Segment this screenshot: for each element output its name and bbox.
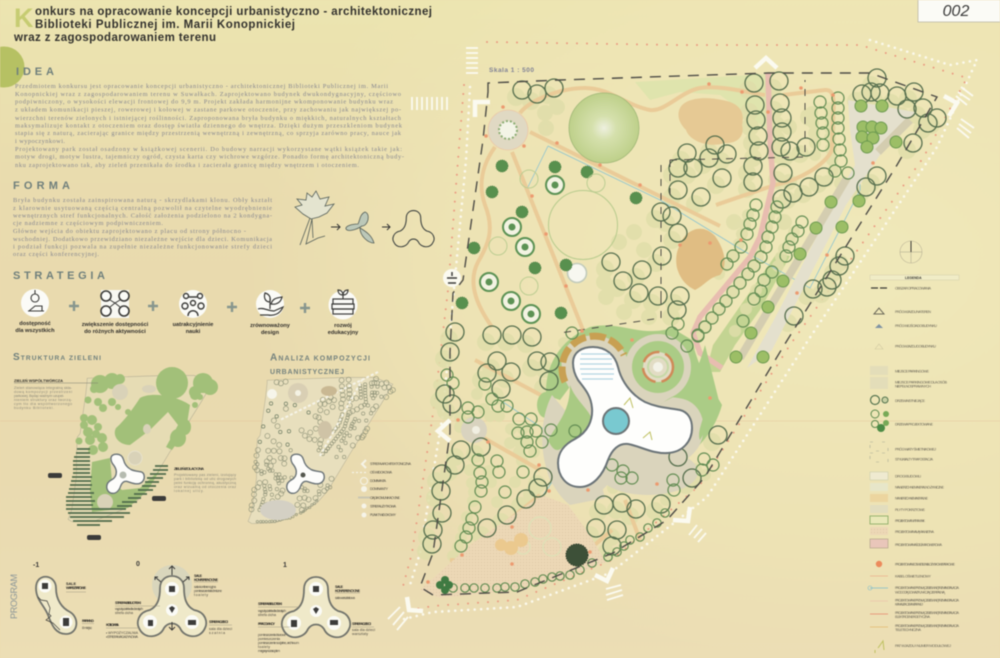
level one: sala warsztatowa xyxy=(335,596,355,600)
idea green circle xyxy=(0,46,24,88)
legend labels: NAWIERZCHNIE MINERALNE xyxy=(895,496,928,500)
piazza south-east xyxy=(598,449,698,495)
analysis legend: STREFA ARCHITEKTONICZNA xyxy=(370,462,412,466)
level zero: wypożyczalnia dla dorosłych xyxy=(115,607,143,611)
outlined existing trees xyxy=(423,69,946,555)
building surroundings: lawn xyxy=(546,325,722,455)
panel: forma xyxy=(13,180,434,258)
inner dashed zones xyxy=(560,80,805,333)
level zero: STREFA BIBLIOTEKI xyxy=(115,601,141,605)
level one: strefa cicha xyxy=(258,613,276,617)
legend labels: PROJEKTOWANE PRZYŁĄCZE I ZEWNĘTRZNA INSTALACJA xyxy=(895,598,959,602)
level one: 1 xyxy=(283,562,287,569)
strategy item: accessibility xyxy=(15,289,55,334)
greenery map xyxy=(48,367,218,540)
strategy item: learning xyxy=(173,290,213,335)
program label: PROGRAM xyxy=(9,574,19,619)
forma paragraph: wschodniej. Dodatkowo przewidziano niezależne wejście dla dzieci. Komunikacja xyxy=(13,236,272,243)
callout: isolating greenery: park i bibliotekę od ulic drogowych xyxy=(174,477,236,481)
strategy item: accessibility: dostępność xyxy=(19,321,51,327)
legend xyxy=(868,275,959,653)
sand play area xyxy=(420,495,606,598)
legend labels: MIEJSCE PARKINGOWE DLA OSÓB xyxy=(895,380,947,384)
site boundary dashed xyxy=(420,73,937,595)
legend labels: TELETECHNICZNA xyxy=(895,628,921,632)
level zero: SALE xyxy=(194,574,202,578)
level one: SALE xyxy=(335,585,343,589)
pink bicycle path xyxy=(693,73,773,368)
legend labels: NIEPEŁNOSPRAWNYCH xyxy=(895,384,931,388)
site outline xyxy=(68,375,213,522)
analysis legend: PUNKT WIDOKOWY xyxy=(370,513,397,517)
legend labels: PRÓG WIATY ŚMIETNIKOWEJ xyxy=(895,446,936,452)
level zero: szatnia xyxy=(209,631,225,635)
white crosswalk stripes xyxy=(388,48,974,630)
axes xyxy=(280,372,378,456)
strategy item: accessibility: dla wszystkich xyxy=(15,328,55,334)
idea paragraph: Przedmiotem konkursu jest opracowanie koncepcji urbanistyczno - architektonicznej Biblioteki Publicznej im. Marii xyxy=(15,83,388,90)
level one: PRACOWNICY xyxy=(258,622,275,626)
strategy item: education xyxy=(328,290,359,336)
west lawn patch xyxy=(537,392,555,418)
heading: STRUKTURA ZIELENI xyxy=(13,352,101,363)
analysis legend: DOMINANTA xyxy=(370,479,387,483)
pink and white perimeter dots xyxy=(400,40,977,620)
forma paragraph: Bryła budynku została zainspirowana naturą - skrzydlakami klonu. Obły kształt xyxy=(13,197,272,204)
legend labels: PRÓG WJAZDU DO BUDYNKU xyxy=(895,344,936,348)
legend labels: PROJEKTOWANA ŁĄKA KWIETNA xyxy=(895,530,934,534)
sheet number box xyxy=(918,0,1000,22)
level zero: strefa cicha xyxy=(115,611,133,615)
analysis legend: OŚ WIDOKOWA xyxy=(370,470,393,474)
central atrium xyxy=(603,408,629,434)
analysis legend: STREFA UŻYTKOWA xyxy=(370,504,397,508)
level minus one: SALE xyxy=(66,582,76,586)
level one: toalety xyxy=(258,645,270,649)
panel: program xyxy=(9,561,375,653)
legend symbols xyxy=(868,288,889,653)
legend labels: PROJEKTOWANE PRZYŁĄCZE I ZEWNĘTRZNA INSTALACJA xyxy=(895,586,959,590)
idea paragraph: wierzchni terenów zielonych i istniejącej roślinności. Zaproponowana bryła budynku o miękkich, naturalnych kształtach xyxy=(15,115,402,122)
legend labels: KABEL OŚWIETLENIOWY xyxy=(895,574,931,578)
level one: wypożyczalnia dla dorosłych xyxy=(258,609,286,613)
callout: isolating greenery: Projektowany pas zieleni, izolujący xyxy=(174,473,236,477)
plus xyxy=(300,303,310,313)
legend labels: PROJEKTOWANE OSWIETLENIE ŁOŻYSKOWE PARKOWE xyxy=(895,562,955,566)
callout: isolating greenery: ZIELEŃ IZOLACYJNA xyxy=(174,466,204,471)
title: wraz z zagospodarowaniem terenu xyxy=(13,32,216,44)
level zero: sala dla dzieci xyxy=(209,627,232,631)
blue utility lines xyxy=(500,146,860,530)
building mini xyxy=(107,454,144,493)
legend labels xyxy=(895,286,959,648)
composition map xyxy=(248,372,395,524)
lawns near entrance xyxy=(660,345,720,440)
round entrance plaza xyxy=(625,334,691,400)
legend labels: MIEJSCE PARKINGOWE xyxy=(895,370,929,374)
building footprint xyxy=(558,347,692,487)
legend labels: PAT WJAZDU I NUMER MODUŁOWEJ xyxy=(895,644,951,648)
title: K xyxy=(14,3,34,33)
callout: co-creating greenery: dową kompozycji przestrzeni xyxy=(14,390,72,394)
car icons xyxy=(48,473,166,540)
library rows in north lobe xyxy=(580,354,614,379)
amphitheatre arcs xyxy=(562,336,624,382)
legend labels: NAWIERZCHNIE MINERALNO - ŻYWICZNE xyxy=(895,484,944,490)
legend labels: DRZEWA PROJEKTOWANE xyxy=(895,422,933,426)
level one: STREFA BIBLIOTEKI xyxy=(258,602,282,606)
level minus one: WARSZTATOWE xyxy=(66,586,86,590)
legend labels: KANALIZACJI SANITARNEJ xyxy=(895,602,923,606)
isolating greenery stripes xyxy=(66,449,168,525)
analysis legend: DOMINANTY xyxy=(370,487,389,491)
idea paragraph: motyw drogi, motyw lustra, tajemniczy ogród, czysta karta czy wichrowe wzgórze. Ponadto formę architektoniczną budy- xyxy=(15,154,404,160)
strategy item: education: rozwój xyxy=(334,323,352,329)
idea paragraph: nku zaprojektowano tak, aby zieleń przenikała do środka i zacierała granicę między wnętrzem i otoczeniem. xyxy=(15,162,359,169)
level zero: • WYPOŻYCZALNIA xyxy=(106,630,139,635)
tan meadow blob north xyxy=(678,98,743,145)
level one: pomieszczenia biurowe xyxy=(258,633,286,637)
large lawn circle xyxy=(569,93,639,163)
idea paragraph xyxy=(15,83,404,169)
peach play blobs xyxy=(495,533,528,555)
white corner chevrons xyxy=(407,58,957,611)
idea paragraph: stapia się z naturą, zacierając granice między przestrzenią wewnętrzną i zewnętrzną, co sprzyja zarówno pracy, nauce jak xyxy=(15,130,402,137)
pale outlined trees xyxy=(489,170,605,295)
legend labels: PRÓG WJAZDU NA TEREN xyxy=(895,309,931,314)
heading: URBANISTYCZNEJ xyxy=(270,369,344,376)
callout: co-creating greenery: ZIELEŃ WSPÓŁTWÓRCZA xyxy=(14,378,63,383)
level one: sala dla dzieci xyxy=(352,628,375,632)
strategy item: sustainable design: design xyxy=(261,330,280,336)
legend header: LEGENDA xyxy=(905,276,922,280)
strategy item: sustainable design xyxy=(250,290,291,336)
strategy item: sustainable design: zrównoważony xyxy=(250,323,291,329)
form derivation diagram: leaf to samara to trefoil xyxy=(295,191,434,247)
plus xyxy=(148,301,158,311)
legend labels: OBSZAR OPRACOWANIA xyxy=(895,286,931,290)
callout: isolating greenery: oraz wizualną od otoczenia oraz xyxy=(174,485,236,489)
forma paragraph: cje nadziemne z częściowym podpiwniczeniem. xyxy=(13,220,163,227)
level zero: • STREFA MAGAZYNOWA xyxy=(106,635,139,639)
callout: co-creating greenery xyxy=(14,378,98,410)
idea heading: IDEA xyxy=(16,66,54,78)
outlined proposed trees xyxy=(441,92,854,592)
callout: isolating greenery xyxy=(174,466,236,493)
entry arrows xyxy=(155,566,189,630)
level one: KONFERENCYJNE xyxy=(335,589,360,593)
analysis legend: CIĄGI KOMUNIKACYJNE xyxy=(370,496,401,500)
star-pattern specimen trees xyxy=(480,176,564,323)
level one: pomieszczenia xyxy=(258,637,280,641)
idea paragraph: z układem komunikacji pieszej, rowerowej i kołowej w zastane parkowe otoczenie, przy zachowaniu jak największej po- xyxy=(15,106,401,114)
olive filled trees xyxy=(730,100,902,363)
legend labels: DROGI BUDOWLI xyxy=(895,474,921,478)
sheet number box: 002 xyxy=(943,3,969,20)
atrium mini xyxy=(120,472,126,478)
play circles xyxy=(516,517,561,556)
level zero xyxy=(106,561,232,639)
plus xyxy=(227,302,237,312)
paving west and south of building xyxy=(542,395,605,505)
pedestrian and bicycle sign xyxy=(443,269,461,287)
legend labels: WODOCIĄGOWA Z FUNKCJĄ CZERPALNIĄ xyxy=(895,590,945,594)
idea paragraph: i wypoczynkowi. xyxy=(15,138,65,145)
callout: co-creating greenery: cym tło dla współtworzonego xyxy=(14,402,72,406)
strategy item: activities xyxy=(82,290,149,335)
level zero: STREFA DZIECI xyxy=(209,620,228,624)
level one: pomieszczenie socjalne, archiwum xyxy=(258,641,299,645)
plus xyxy=(69,301,79,311)
level zero: KONFERENCYJNE xyxy=(194,578,218,582)
title: Biblioteki Publicznej im. Marii Konopnickiej xyxy=(35,19,295,31)
level zero: pomieszczenia techniczne xyxy=(194,589,222,593)
legend labels: PRÓG WEJŚCIA DO BUDYNKU xyxy=(895,323,937,328)
legend labels: PROJEKTOWANE PRZYŁĄCZE I ZEWNĘTRZNA INSTALACJA xyxy=(895,624,959,628)
icon: trefoil outline xyxy=(393,211,434,247)
terrace lawn west of building xyxy=(548,385,592,450)
callout: co-creating greenery: budynku Biblioteki. xyxy=(14,406,54,410)
eastern green strip xyxy=(706,253,790,372)
dense dark tree xyxy=(566,544,588,566)
building surroundings: paving halo xyxy=(558,347,692,487)
callout: co-creating greenery: nieniem struktury oraz tworzą- xyxy=(14,398,73,402)
idea paragraph: podpiwniczony, o wysokości elewacji frontowej do 9,9 m. Projekt zakłada harmonijne wkomponowanie budynku wraz xyxy=(15,98,393,106)
forma paragraph xyxy=(13,197,272,258)
dark filled trees xyxy=(456,160,642,319)
icon: maple leaf xyxy=(295,191,334,219)
idea paragraph: Konopnickiej wraz z zagospodarowaniem terenu w Suwałkach. Zaprojektowano budynek dwukondygnacyjny, częściowo xyxy=(15,91,401,98)
level minus one: 8 miejsc xyxy=(82,626,92,630)
legend labels: PROJEKTOWANY TRAWNIK xyxy=(895,519,925,523)
park paths xyxy=(423,87,834,590)
callout: co-creating greenery: parkowej. Będąc ważnym uzupeł- xyxy=(14,394,65,398)
pale tree canopies xyxy=(417,76,940,562)
callout: isolating greenery: lokalnej ulicy. xyxy=(174,489,204,493)
level one xyxy=(258,562,375,653)
strategia heading: STRATEGIA xyxy=(13,270,105,282)
entry numerals xyxy=(624,398,652,440)
strategy item: activities: do różnych aktywności xyxy=(84,329,146,335)
arrow xyxy=(331,224,340,230)
pale clearings xyxy=(97,384,156,510)
panel: strategia xyxy=(13,270,359,336)
level minus one: -1 xyxy=(33,562,39,569)
heading: ANALIZA KOMPOZYCJI xyxy=(270,352,370,364)
level one: STREFA DZIECI xyxy=(352,622,371,626)
panel: struktura zieleni xyxy=(13,352,236,540)
icon: seed stems xyxy=(300,218,325,245)
level minus one: PARKING xyxy=(82,619,94,623)
forma paragraph: i podział funkcji pozwala na zupełnie niezależne funkcjonowanie strefy dzieci xyxy=(13,244,272,250)
panel: idea xyxy=(0,46,404,169)
strategy item: activities: zwiększenie dostępności xyxy=(82,322,149,328)
level zero: toalety xyxy=(194,593,208,597)
level zero: KOTŁOWNIA xyxy=(106,623,119,627)
legend header xyxy=(870,275,959,280)
panel: analiza kompozycji urbanistycznej xyxy=(248,352,412,524)
level one: warsztaty xyxy=(352,632,368,636)
co-creating greenery blobs xyxy=(76,367,218,512)
legend labels: PŁYTY POKRZTOWE xyxy=(895,508,925,512)
title: onkurs na opracowanie koncepcji urbanistyczno - architektonicznej xyxy=(35,6,432,18)
small white fountain circle xyxy=(568,264,586,282)
north arrow xyxy=(900,241,922,263)
callout: isolating greenery: pełni funkcję ochronną, akustyczną xyxy=(174,481,236,485)
level minus one xyxy=(33,562,94,634)
forma paragraph: z klarownie usytuowaną częścią centralną pozwolił na czytelne wyodrębnienie xyxy=(13,205,272,212)
dominants xyxy=(288,383,308,403)
arrow xyxy=(382,224,390,230)
tan meadow blob south xyxy=(676,229,725,290)
forma paragraph: wewnętrznych stref funkcjonalnych. Całość założenia podzielono na 2 kondygna- xyxy=(13,212,272,220)
idea paragraph: maksymalizuje kontakt z otoczeniem oraz dostęp światła dziennego do wnętrza. Dzięki dużym przeszkleniom budynek xyxy=(15,122,403,130)
upper green strip xyxy=(635,74,768,130)
legend labels: DRZEWA ISTNIEJĄCE xyxy=(895,399,925,403)
grey eastern promenade xyxy=(740,100,915,368)
analysis legend xyxy=(352,460,412,518)
stone plaza north-west xyxy=(488,110,528,150)
legend labels: PROJEKTOWANA ŚCIEŻKA ROWEROWA xyxy=(895,542,942,547)
title xyxy=(13,3,432,44)
forma heading: FORMA xyxy=(13,180,70,192)
small stone plaza west xyxy=(461,417,487,443)
orange lamp dots xyxy=(426,82,875,584)
forma paragraph: oraz części konferencyjnej. xyxy=(13,251,99,258)
dark oak xyxy=(436,576,453,594)
legend labels: ELEKTROENERGETYCZNA xyxy=(895,615,930,619)
callout: co-creating greenery: Zieleń stanowiąca integralną skła- xyxy=(14,386,73,390)
legend labels: STYLIKI/ALTY TRAFOSTACJA xyxy=(895,458,933,462)
level zero: sala konferencyjna xyxy=(194,585,216,589)
level zero: 0 xyxy=(136,561,140,568)
strategy item: education: edukacyjny xyxy=(328,330,359,336)
heading xyxy=(270,352,370,376)
forma paragraph: Główne wejścia do obiektu zaprojektowano z placu od strony północno - xyxy=(13,228,246,235)
open lawn circle xyxy=(548,190,618,260)
idea paragraph: Projektowany park został osadzony w książkowej scenerii. Do budowy narracji wykorzystane wątki książek takie jak: xyxy=(15,146,402,153)
level one: magazyn czasopism xyxy=(258,649,280,653)
icon: samara seed xyxy=(346,212,374,243)
panel: site plan xyxy=(388,40,977,630)
strategy item: learning: nauki xyxy=(186,329,201,335)
scale label: Skala 1 : 500 xyxy=(489,67,534,74)
legend labels: PROJEKTOWANE PRZYŁĄCZE I ZEWNĘTRZNA INSTALACJA xyxy=(895,611,959,615)
strategy item: learning: uatrakcyjnienie xyxy=(173,322,213,328)
